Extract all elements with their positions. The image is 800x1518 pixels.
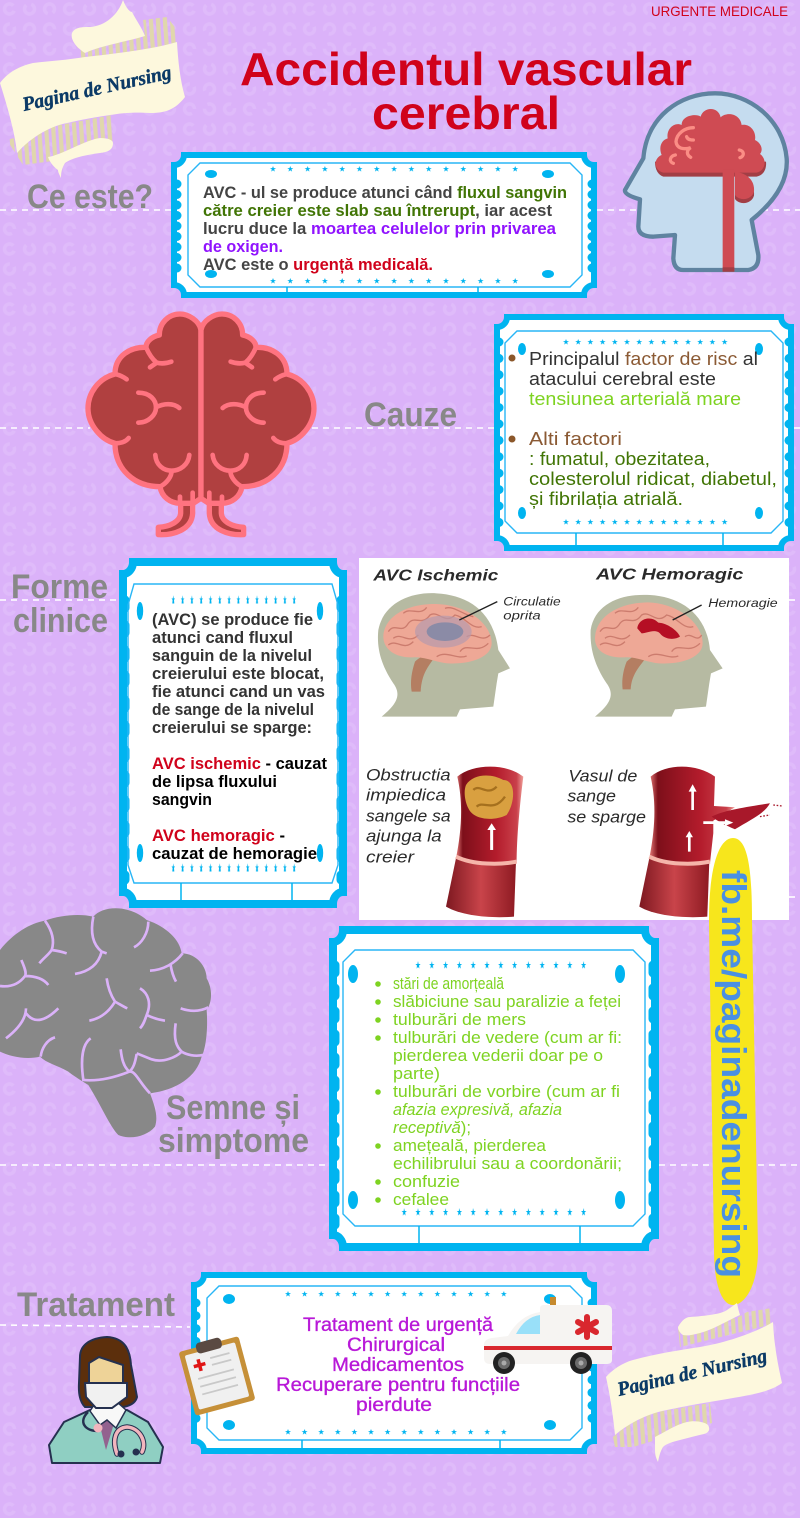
ribbon: Pagina de Nursing bottom bbox=[606, 1303, 782, 1462]
title: cerebral bbox=[372, 87, 560, 139]
heading: Semne și simptome bbox=[158, 1089, 309, 1160]
text block: treatment: Medicamentos bbox=[332, 1354, 464, 1376]
text block: clinical forms: cauzat de hemoragie bbox=[152, 844, 317, 863]
yellow pill: facebook link bbox=[709, 838, 758, 1305]
text block: risk factors: Principalul factor de risc al bbox=[529, 349, 758, 369]
text block: definition bbox=[203, 183, 567, 274]
text block: symptoms: tulburări de mers bbox=[393, 1010, 526, 1029]
icon: ambulance bbox=[484, 1297, 612, 1374]
icon: doctor bbox=[49, 1337, 163, 1463]
text block: symptoms: echilibrului sau a coordonării; bbox=[393, 1154, 622, 1173]
illustration labels: AVC Hemoragic bbox=[595, 566, 744, 583]
text block: clinical forms: sanguin de la nivelul bbox=[152, 646, 312, 665]
icon: red brain bbox=[88, 314, 314, 535]
text block: symptoms: pierderea vederii doar pe o bbox=[393, 1046, 603, 1065]
icon: grey brain bbox=[0, 908, 211, 1137]
heading: Semne și simptome: Semne și bbox=[166, 1089, 300, 1127]
illustration labels: creier bbox=[366, 847, 416, 866]
ribbon: Pagina de Nursing top: Pagina de Nursing bbox=[19, 62, 173, 116]
illustration labels: oprita bbox=[503, 608, 541, 622]
text block: symptoms: tulburări de vedere (cum ar fi: bbox=[393, 1028, 622, 1047]
icon: head with brain bbox=[625, 93, 787, 272]
illustration labels bbox=[366, 566, 778, 866]
text block: clinical forms: AVC hemoragic - bbox=[152, 826, 285, 845]
ribbon: Pagina de Nursing bottom: Pagina de Nursing bbox=[614, 1345, 769, 1401]
panel: semne si simptome bbox=[333, 930, 655, 1247]
heading: Forme clinice: clinice bbox=[13, 602, 108, 640]
text block: risk factors: atacului cerebral este bbox=[529, 369, 716, 389]
yellow pill: facebook link: fb.me/paginadenursing bbox=[714, 870, 752, 1278]
text block: symptoms: tulburări de vorbire (cum ar fi bbox=[393, 1082, 620, 1101]
head ischemic bbox=[378, 593, 510, 717]
text block: definition: lucru duce la moartea celulelor prin privarea bbox=[203, 219, 557, 238]
panel: ce este bbox=[174, 155, 594, 295]
text block: risk factors bbox=[529, 349, 777, 509]
text block: clinical forms: creierului este blocat, bbox=[152, 664, 324, 683]
illustration labels: Hemoragie bbox=[708, 596, 778, 610]
text block: clinical forms: (AVC) se produce fie bbox=[152, 610, 313, 629]
chart: AVC illustration bbox=[359, 558, 789, 920]
text block: risk factors: : fumatul, obezitatea, bbox=[529, 449, 710, 469]
text block: risk factors: și fibrilația atrială. bbox=[529, 489, 683, 509]
illustration labels: AVC Ischemic bbox=[372, 568, 499, 585]
illustration labels: impiedica bbox=[366, 786, 446, 805]
illustration labels: se sparge bbox=[567, 808, 646, 827]
text block: treatment: Tratament de urgență bbox=[303, 1314, 493, 1336]
illustration labels: sange bbox=[567, 787, 616, 806]
heading: Semne și simptome: simptome bbox=[158, 1122, 309, 1160]
text block: risk factors: Alti factori bbox=[529, 429, 622, 449]
text block: symptoms: slăbiciune sau paralizie a feței bbox=[393, 992, 621, 1011]
text block: symptoms: afazia expresivă, afazia bbox=[393, 1100, 562, 1119]
text block: clinical forms: atunci cand fluxul bbox=[152, 628, 293, 647]
panel: tratament bbox=[194, 1275, 594, 1451]
text block: clinical forms bbox=[152, 610, 327, 863]
text block: clinical forms: creierului se sparge: bbox=[152, 718, 312, 737]
text block: clinical forms: de lipsa fluxului bbox=[152, 772, 277, 791]
illustration labels: Circulatie bbox=[503, 595, 561, 609]
text block: risk factors: tensiunea arterială mare bbox=[529, 389, 741, 409]
source label: URGENTE MEDICALE bbox=[651, 3, 788, 19]
text block: symptoms: receptivă); bbox=[393, 1118, 471, 1137]
dashed section lines bbox=[0, 210, 800, 1327]
heading: Forme clinice: Forme bbox=[11, 568, 108, 606]
heading: Forme clinice bbox=[11, 568, 108, 640]
text block: definition: către creier este slab sau întrerupt, iar acest bbox=[203, 201, 552, 220]
panel: cauze bbox=[497, 317, 791, 548]
text block: definition: AVC este o urgență medicală. bbox=[203, 255, 433, 274]
text block: treatment: Recuperare pentru funcțiile bbox=[276, 1374, 520, 1396]
heading: Tratament: Tratament bbox=[17, 1286, 175, 1324]
text block: symptoms bbox=[393, 974, 622, 1209]
text block: clinical forms: de sange de la nivelul bbox=[152, 700, 314, 719]
vessel ruptured bbox=[639, 767, 782, 917]
text block: treatment: pierdute bbox=[356, 1394, 432, 1416]
heading: Cauze: Cauze bbox=[364, 396, 457, 434]
text block: risk factors: colesterolul ridicat, diabetul, bbox=[529, 469, 777, 489]
title bbox=[240, 43, 692, 139]
vessel blocked bbox=[446, 767, 523, 917]
panel: forme clinice bbox=[123, 562, 343, 904]
text block: clinical forms: AVC ischemic - cauzat bbox=[152, 754, 327, 773]
head hemorrhagic bbox=[591, 595, 723, 717]
text block: treatment: Chirurgical bbox=[347, 1334, 445, 1356]
text block: symptoms: stări de amorțeală bbox=[393, 974, 504, 993]
illustration labels: ajunga la bbox=[366, 827, 442, 846]
text block: symptoms: cefalee bbox=[393, 1190, 449, 1209]
bullets bbox=[375, 981, 381, 1203]
text block: treatment bbox=[276, 1314, 520, 1416]
bullets bbox=[508, 354, 516, 442]
icon: clipboard bbox=[177, 1332, 255, 1416]
ribbon: Pagina de Nursing top bbox=[0, 0, 185, 178]
text block: symptoms: parte) bbox=[393, 1064, 440, 1083]
illustration labels: Obstructia bbox=[366, 766, 451, 785]
illustration labels: sangele sa bbox=[366, 807, 451, 826]
text block: symptoms: amețeală, pierderea bbox=[393, 1136, 547, 1155]
text block: clinical forms: fie atunci cand un vas bbox=[152, 682, 325, 701]
text block: symptoms: confuzie bbox=[393, 1172, 460, 1191]
title: Accidentul vascular bbox=[240, 43, 692, 95]
heading: Ce este?: Ce este? bbox=[27, 178, 153, 216]
text block: definition: AVC - ul se produce atunci când fluxul sangvin bbox=[203, 183, 567, 202]
text block: definition: de oxigen. bbox=[203, 237, 283, 256]
text block: clinical forms: sangvin bbox=[152, 790, 212, 809]
illustration labels: Vasul de bbox=[568, 767, 637, 786]
